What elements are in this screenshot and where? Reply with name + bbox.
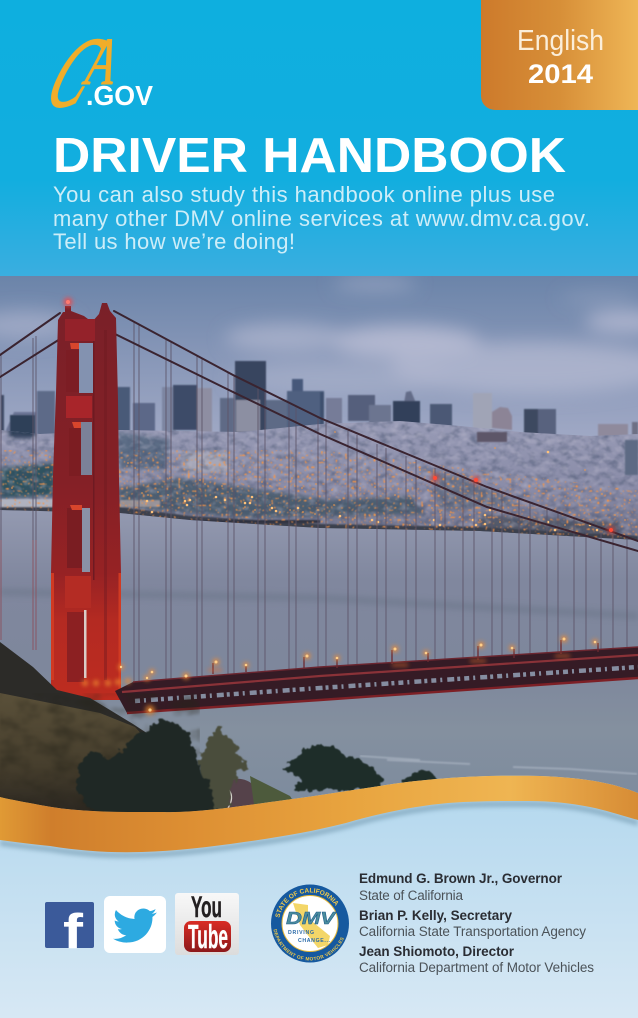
tower lighting on near suspenders bbox=[1, 540, 36, 650]
intro text: Tell us how we’re doing! bbox=[53, 229, 295, 254]
random city sparkle bbox=[0, 450, 638, 545]
tower openings bbox=[79, 343, 94, 678]
water bbox=[0, 505, 638, 805]
lower background panel bbox=[0, 790, 638, 1018]
language and year badge: 2014 bbox=[528, 59, 593, 89]
officials credits: Brian P. Kelly, Secretary bbox=[359, 908, 512, 923]
dark and light building patches bbox=[0, 430, 622, 535]
officials credits: Edmund G. Brown Jr., Governor bbox=[359, 871, 563, 886]
pale tree bbox=[198, 726, 248, 812]
cable beacon lights bbox=[431, 474, 615, 534]
sky with clouds bbox=[0, 276, 638, 446]
language and year badge bbox=[481, 0, 638, 110]
tree: small right bbox=[401, 769, 438, 783]
intro text bbox=[53, 182, 590, 254]
seal: California shape bbox=[293, 903, 330, 948]
DMV seal bbox=[271, 884, 349, 962]
officials credits: State of California bbox=[359, 888, 463, 903]
dark tree bbox=[76, 718, 214, 815]
tower shading bbox=[51, 319, 121, 690]
social media icons bbox=[45, 891, 239, 959]
seal: DMV letters: DMV bbox=[286, 908, 337, 928]
seal: slogan: CHANGE... bbox=[298, 938, 331, 944]
tree: right side bbox=[281, 745, 384, 790]
city skyline bbox=[0, 360, 638, 436]
suspender cables bbox=[1, 322, 627, 681]
officials credits: California State Transportation Agency bbox=[359, 924, 586, 939]
seal: slogan: DRIVING bbox=[288, 930, 314, 936]
officials credits: Jean Shiomoto, Director bbox=[359, 944, 515, 959]
bridge lamps bbox=[82, 636, 598, 715]
icon: YouTube: You bbox=[191, 891, 222, 924]
CA.GOV logo: C bbox=[32, 17, 119, 128]
intro text: many other DMV online services at www.dmv.ca.gov. bbox=[53, 206, 590, 231]
title: DRIVER HANDBOOK bbox=[53, 129, 566, 183]
seal: lower ring text: DEPARTMENT OF MOTOR VEHICLES bbox=[274, 929, 344, 960]
intro text: You can also study this handbook online plus use bbox=[53, 182, 555, 207]
icon: Facebook: f bbox=[63, 905, 84, 959]
icon: Twitter bbox=[104, 896, 166, 953]
bridge deck bbox=[115, 647, 638, 713]
seal: upper ring text: STATE OF CALIFORNIA bbox=[275, 888, 338, 918]
bridge tower bbox=[51, 298, 121, 700]
CA.GOV logo: .GOV bbox=[86, 80, 154, 111]
photo: Golden Gate Bridge and San Francisco bbox=[0, 276, 638, 815]
header panel bbox=[0, 0, 638, 276]
city lights bbox=[11, 431, 631, 532]
tower top beacon bbox=[64, 298, 72, 306]
officials credits: California Department of Motor Vehicles bbox=[359, 960, 594, 975]
icon: YouTube: Tube bbox=[188, 918, 228, 955]
seal: slogan bbox=[288, 930, 331, 944]
hillside and trees bbox=[0, 642, 440, 815]
shadow under wave bbox=[0, 801, 638, 858]
city hillside bbox=[0, 421, 638, 540]
officials credits bbox=[359, 871, 594, 975]
icon: YouTube bbox=[175, 891, 239, 955]
CA.GOV logo: A bbox=[78, 24, 123, 99]
icon: Facebook bbox=[45, 902, 94, 959]
gold wave banner bbox=[0, 776, 638, 852]
main cables bbox=[0, 311, 638, 551]
language and year badge: English bbox=[517, 25, 604, 57]
road and bank bbox=[226, 778, 258, 808]
